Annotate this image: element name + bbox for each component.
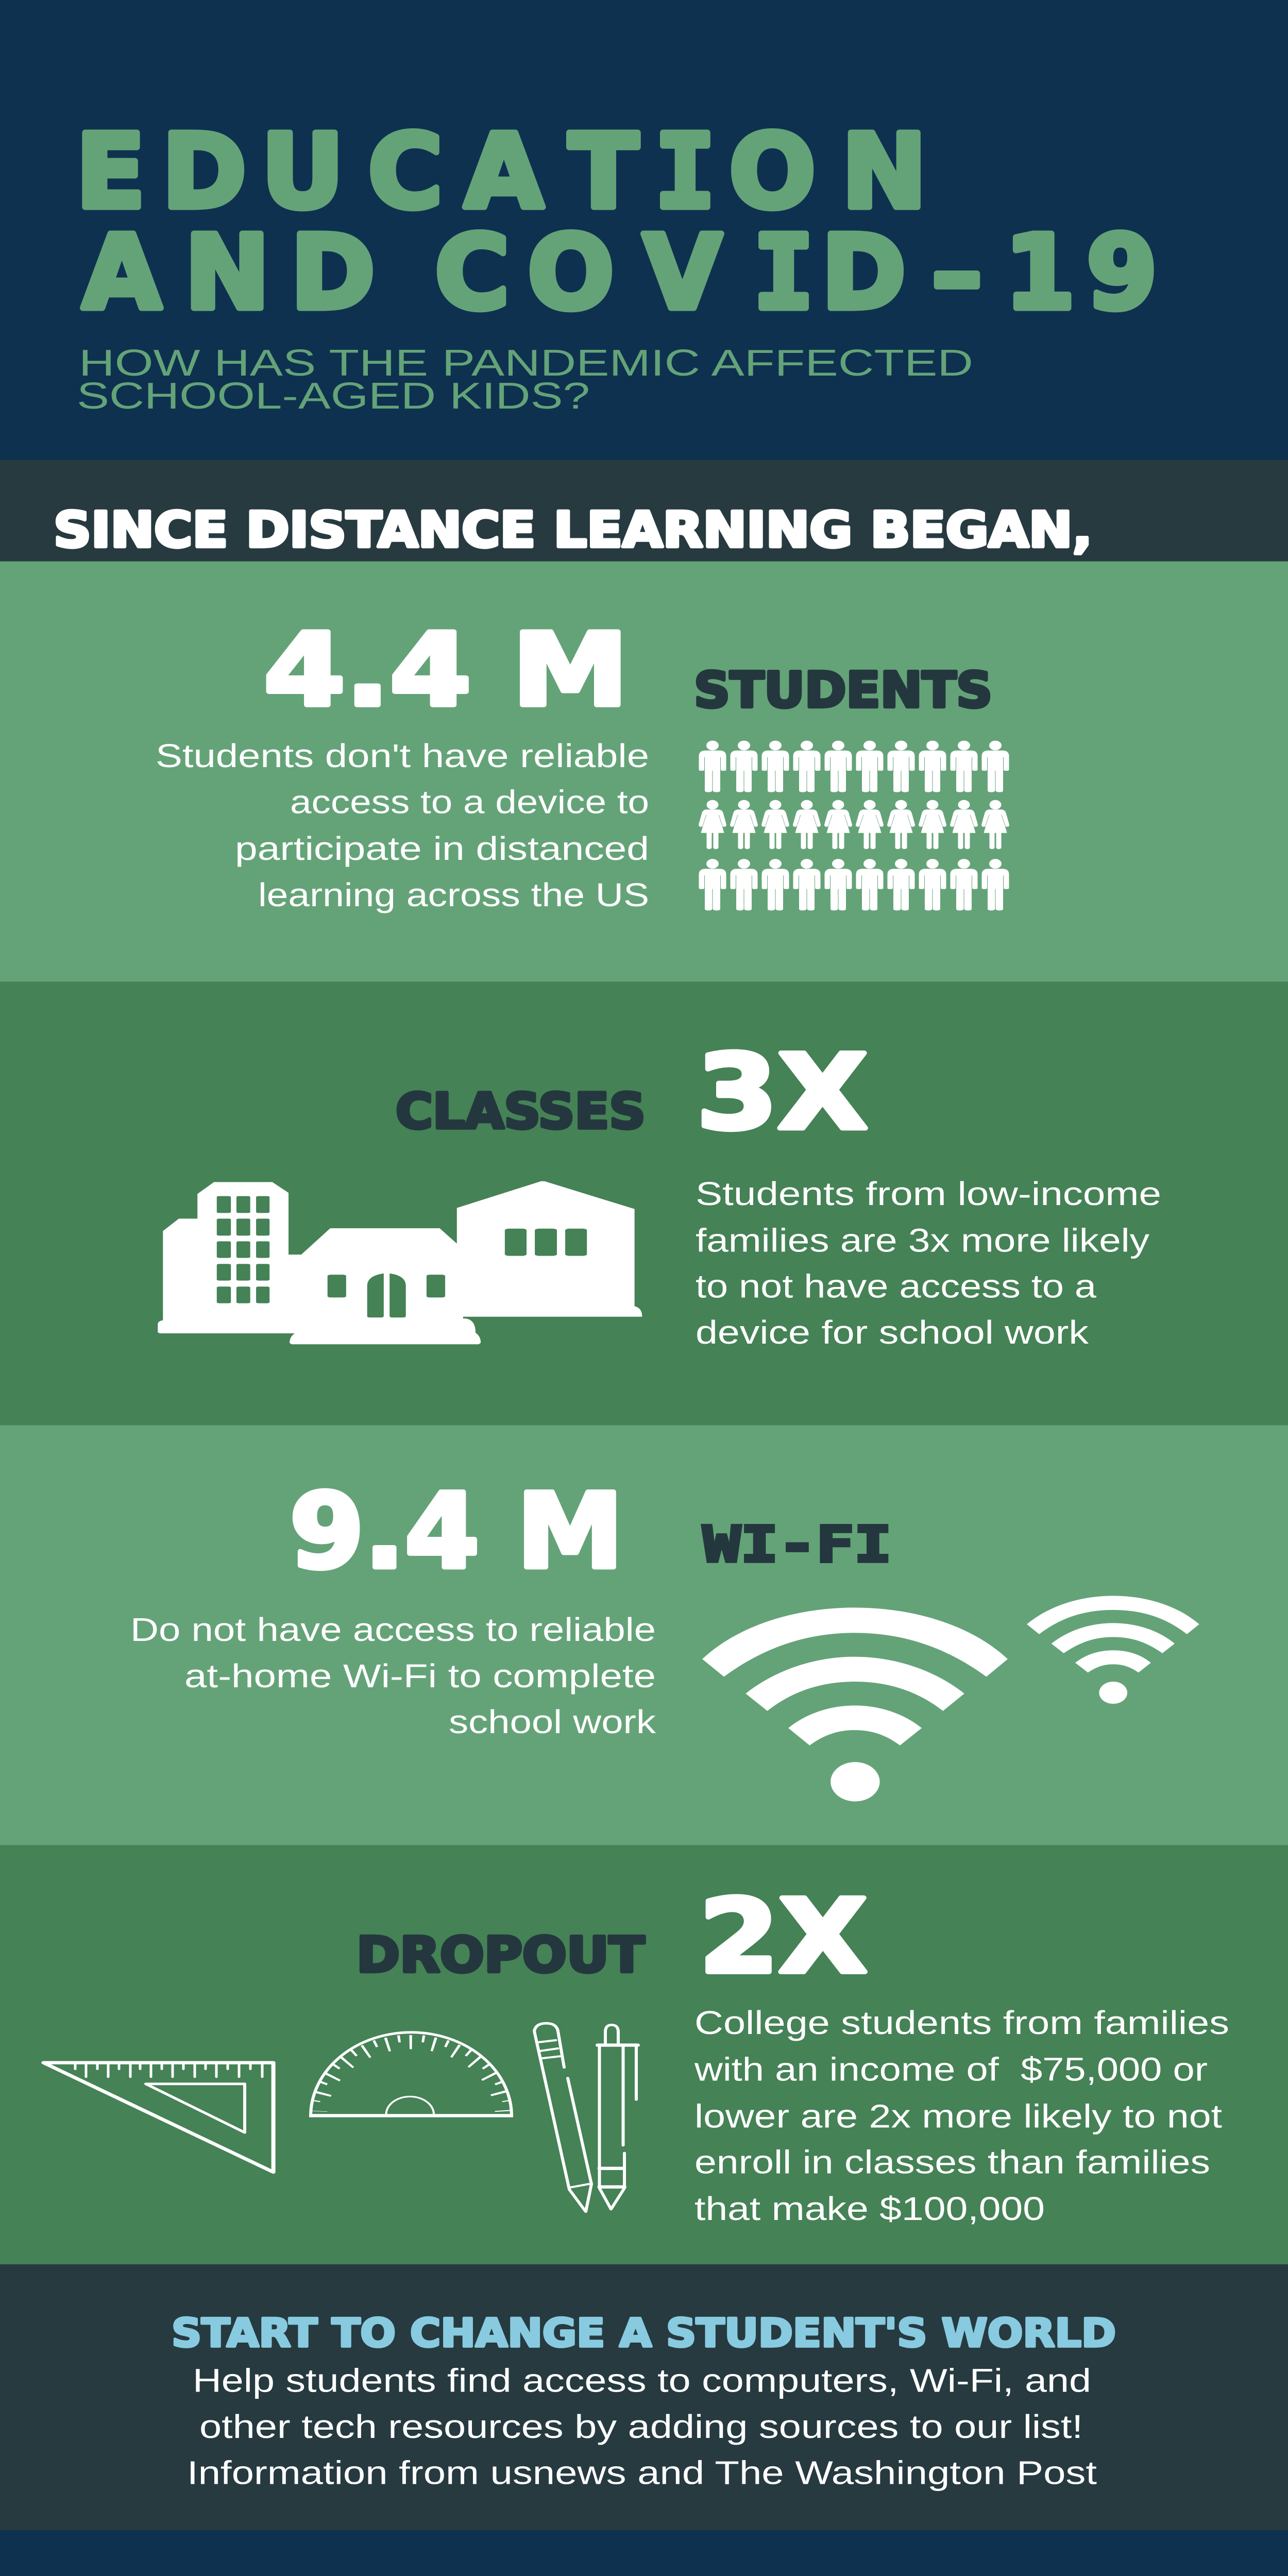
panel: call to action [0, 2264, 1288, 2530]
subtitle: SCHOOL-AGED KIDS? [77, 375, 590, 417]
icon: set square [43, 2063, 274, 2172]
label: students: STUDENTS [694, 662, 992, 719]
icon: large wi-fi [702, 1607, 1008, 1802]
stat description: College students from families [694, 2005, 1229, 2041]
stat description: Students from low-income [696, 1176, 1161, 1212]
intro heading: SINCE DISTANCE LEARNING BEGAN, [54, 502, 1092, 558]
footer band [0, 2530, 1288, 2576]
stat description: at-home Wi-Fi to complete [184, 1658, 656, 1694]
call to action text: Help students find access to computers, Wi-Fi, and [193, 2362, 1091, 2399]
stat description [696, 1176, 1161, 1351]
stat description [156, 737, 649, 913]
title: D–19 [821, 214, 1157, 332]
stat description: school work [449, 1704, 656, 1740]
icon: small wi-fi [1027, 1596, 1199, 1704]
label: wi-fi: WI-FI [703, 1516, 892, 1573]
stat: 4.4 M: 4.4 M [264, 612, 629, 728]
icon: rows of students [699, 741, 1009, 910]
stat description: Do not have access to reliable [130, 1611, 656, 1648]
title: I [654, 113, 716, 231]
panel: dropout [0, 1845, 1288, 2264]
call to action text: Information from usnews and The Washington Post [187, 2454, 1097, 2492]
panel: students [0, 562, 1288, 982]
stat description: Students don't have reliable [156, 737, 649, 774]
stat: 9.4 M: 9.4 M [290, 1472, 623, 1591]
stat description [694, 2005, 1229, 2227]
stat description: participate in distanced [235, 830, 649, 867]
title: I [753, 214, 815, 332]
panel: wi-fi [0, 1425, 1288, 1845]
stat description: access to a device to [290, 784, 649, 821]
intro band [0, 460, 1288, 562]
subtitle [77, 342, 973, 417]
title: ON [729, 113, 927, 231]
icon: pencil [534, 2023, 591, 2212]
stat: 3X: 3X [697, 1033, 868, 1153]
stat description: families are 3x more likely [696, 1222, 1150, 1259]
title [76, 113, 1157, 332]
stat description [130, 1611, 656, 1740]
call to action text: other tech resources by adding sources to our list! [199, 2409, 1083, 2445]
call to action text [187, 2362, 1097, 2492]
stat description: that make $100,000 [694, 2190, 1045, 2227]
label: dropout: DROPOUT [357, 1927, 645, 1984]
stat: 2X: 2X [699, 1877, 867, 1996]
label: classes: CLASSES [396, 1083, 646, 1140]
icon: pen [598, 2025, 638, 2209]
stat description: to not have access to a [696, 1268, 1097, 1305]
icon: protractor [309, 2032, 513, 2116]
panel: classes [0, 982, 1288, 1425]
icon: school buildings [158, 1181, 642, 1344]
title: AND COV [82, 214, 722, 332]
header panel [0, 0, 1288, 460]
stat description: learning across the US [258, 877, 649, 913]
stat description: device for school work [696, 1314, 1089, 1351]
stat description: with an income of $75,000 or [694, 2051, 1208, 2088]
call to action heading: START TO CHANGE A STUDENT'S WORLD [172, 2311, 1116, 2356]
subtitle: HOW HAS THE PANDEMIC AFFECTED [79, 342, 973, 384]
stat description: lower are 2x more likely to not [694, 2098, 1222, 2135]
stat description: enroll in classes than families [694, 2144, 1210, 2181]
title: EDUCAT [76, 113, 638, 231]
